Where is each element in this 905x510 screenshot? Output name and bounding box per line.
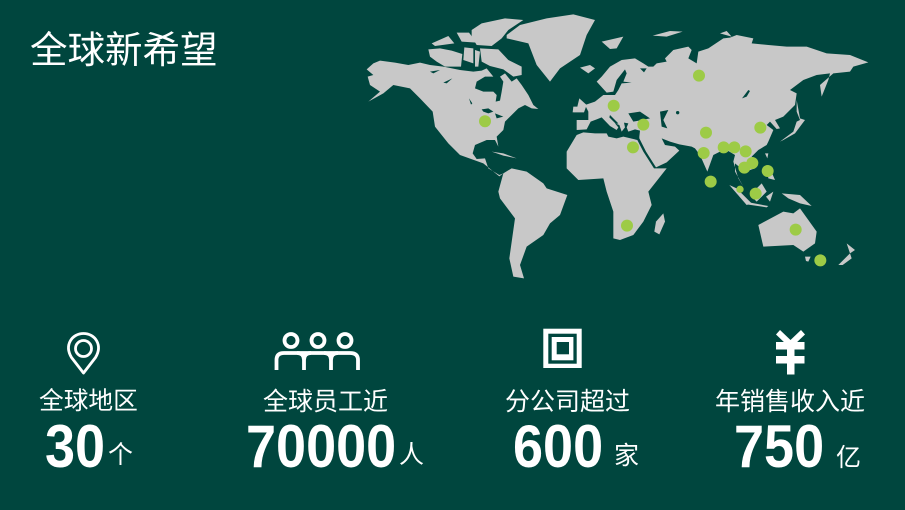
unit: 亿: 亿 [836,444,861,472]
label: revenue: 年销售收入近 [715,388,865,416]
stat: global employees [246,388,424,480]
label: employees: 全球员工近 [263,388,388,416]
number: 30: 30 [45,413,105,480]
number: 70000: 70000 [246,413,396,480]
stat: annual revenue [715,388,865,480]
unit: 家: 家 [614,442,639,470]
location markers [479,70,826,266]
number: 750: 750 [734,413,824,480]
landmass: Eurasia, Africa and Oceania [567,31,868,265]
inland seas of Eurasia [609,68,750,128]
stat: global regions [39,388,138,480]
title: 全球新希望 [30,29,218,71]
number: 600: 600 [513,413,603,480]
landmass: South America, Greenland and Atlantic islands [492,14,623,278]
landmass: North America and Arctic islands [367,18,538,176]
unit: 个: 个 [108,441,133,469]
label: branches: 分公司超过 [505,388,630,416]
inland lakes of North America [430,70,503,118]
label: regions: 全球地区 [39,388,138,415]
unit: 人: 人 [399,441,424,469]
stat: branch offices [505,388,639,480]
